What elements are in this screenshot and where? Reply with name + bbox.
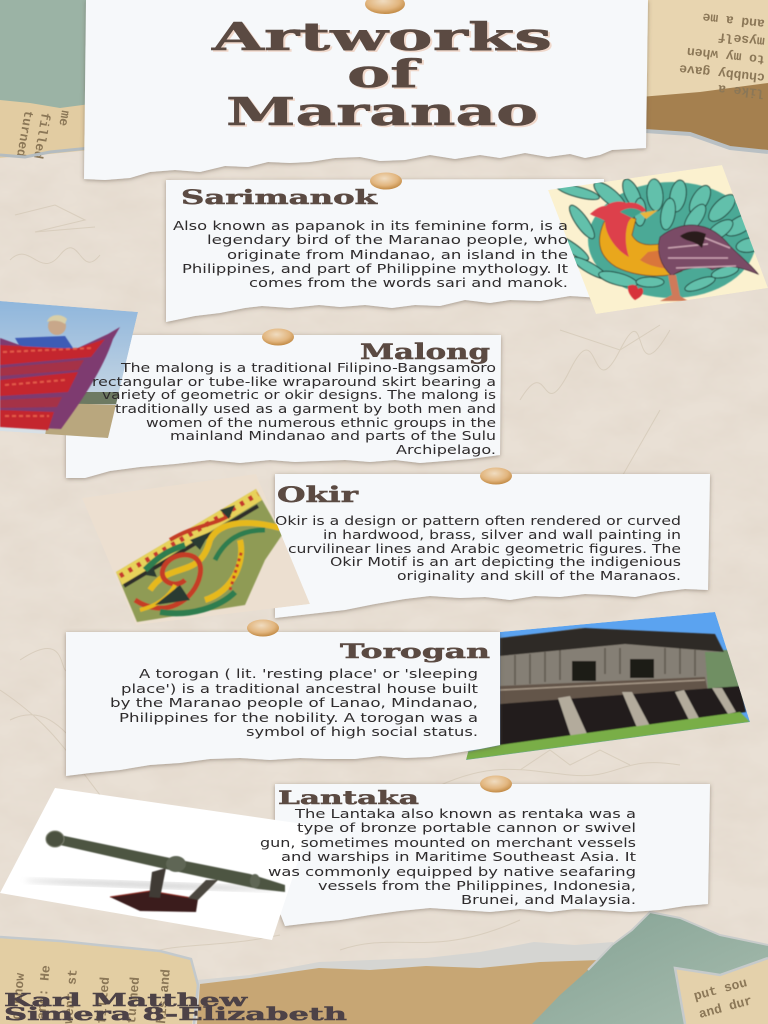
collage corner: bottom strip: [0, 912, 768, 1024]
panel: Lantaka: [275, 784, 710, 926]
collage corner: top left: turned: [13, 109, 36, 158]
heading: Sarimanok: Sarimanok: [181, 186, 378, 209]
collage corner: bottom strip: and: He: [34, 964, 54, 1020]
image: okir pattern: [116, 488, 310, 623]
heading: Malong: Malong: [360, 339, 490, 364]
collage corner: top left: [0, 0, 90, 160]
pin: title: [365, 0, 405, 14]
text: Malong body: traditionally used as a garment by both men and: [115, 401, 496, 416]
collage corner: top right: like a: [717, 81, 765, 101]
text: Okir body: curvilinear lines and Arabic geometric figures. The: [288, 541, 681, 556]
heading: Okir: Okir: [277, 482, 359, 507]
image: woman with malong: [0, 301, 140, 438]
text: Malong body: variety of geometric or okir designs. The malong is: [102, 387, 496, 402]
image: torogan house: [466, 612, 750, 760]
heading: Lantaka: Lantaka: [278, 788, 419, 809]
text: Sarimanok body: legendary bird of the Maranao people, who: [207, 232, 568, 247]
text: Malong body: rectangular or tube-like wraparound skirt bearing a: [92, 374, 496, 389]
text: Lantaka body: Brunei, and Malaysia.: [461, 892, 636, 907]
collage corner: bottom strip: and dur: [697, 993, 754, 1022]
pin: Okir: [480, 468, 512, 484]
text: Malong body: Archipelago.: [396, 442, 496, 457]
panel: Okir: [275, 474, 710, 618]
collage corner: top left: me: [55, 109, 73, 127]
title text: Maranao: [226, 89, 538, 134]
collage corner: top right: myself: [717, 29, 765, 49]
text: Sarimanok body: comes from the words sari and manok.: [249, 275, 568, 290]
text: Torogan body: A torogan ( lit. 'resting place' or 'sleeping: [139, 666, 478, 681]
heading: Torogan: Torogan: [340, 640, 490, 663]
title text: Maranao: [228, 90, 540, 136]
title text: [210, 14, 554, 136]
text: Lantaka body: type of bronze portable cannon or swivel: [297, 820, 636, 835]
text: Sarimanok body: originate from Mindanao, an island in the: [227, 247, 568, 262]
text: Torogan body: by the Maranao people of Lanao, Mindanao,: [110, 695, 478, 710]
text: Malong body: women of the numerous ethnic groups in the: [146, 415, 496, 430]
title text: of: [347, 51, 422, 96]
collage corner: top right: and a me: [702, 9, 765, 31]
text: Lantaka body: vessels from the Philippines, Indonesia,: [318, 878, 636, 893]
collage corner: bottom strip: filled: [94, 976, 113, 1024]
text: Lantaka body: [260, 806, 636, 907]
footer: author credit: [4, 990, 347, 1024]
text: Torogan body: place') is a traditional ancestral house built: [121, 681, 478, 696]
panel: Sarimanok: [166, 179, 604, 322]
text: Okir body: originality and skill of the Maranaos.: [397, 568, 681, 583]
collage corner: bottom strip: his and: [154, 969, 174, 1024]
image: sarimanok bird: [548, 165, 768, 314]
collage corner: top right: [640, 0, 768, 152]
title text: of: [349, 52, 424, 98]
panel: Malong: [66, 335, 501, 478]
text: Okir body: in hardwood, brass, silver and wall painting in: [323, 527, 681, 542]
text: Malong body: mainland Mindanao and parts of the Sulu: [170, 428, 496, 443]
text: Torogan body: [110, 666, 478, 739]
pin: Sarimanok: [370, 172, 402, 190]
text: Lantaka body: The Lantaka also known as rentaka was a: [294, 806, 636, 821]
collage corner: top left: filled: [30, 111, 53, 160]
text: Malong body: [92, 360, 496, 457]
text: Torogan body: Philippines for the nobility. A torogan was a: [119, 710, 478, 725]
collage corner: bottom strip: o know: [9, 972, 28, 1020]
text: Okir body: [275, 513, 681, 583]
title text: Artworks: [212, 16, 554, 60]
collage corner: bottom strip: put sou: [692, 975, 749, 1004]
text: Okir body: Okir Motif is an art depicting the indigenious: [330, 554, 681, 569]
text: Lantaka body: was commonly equipped by native seafaring: [268, 864, 636, 879]
text: Torogan body: symbol of high social status.: [246, 724, 478, 739]
title text: Artworks: [210, 14, 552, 59]
collage corner: bottom strip: went st: [61, 969, 81, 1024]
collage corner: top right: to my when: [686, 44, 765, 67]
text: Lantaka body: gun, sometimes mounted on merchant vessels: [260, 835, 636, 850]
pin: Lantaka: [480, 776, 512, 792]
text: Sarimanok body: Also known as papanok in its feminine form, is a: [173, 218, 568, 233]
text: Sarimanok body: [173, 218, 568, 290]
text: Malong body: The malong is a traditional Filipino-Bangsamoro: [120, 360, 496, 375]
collage corner: top right: chubby gave: [678, 61, 765, 85]
text: Lantaka body: and warships in Maritime Southeast Asia. It: [281, 849, 636, 864]
pin: Torogan: [247, 620, 279, 636]
collage corner: bottom strip: turned: [124, 976, 143, 1024]
text: Sarimanok body: Philippines, and part of Philippine mythology. It: [182, 261, 568, 276]
panel: Torogan: [66, 632, 500, 776]
footer: author credit: Karl Matthew: [4, 990, 248, 1011]
image: lantaka cannon: [0, 788, 310, 940]
pin: Malong: [262, 328, 294, 346]
text: Okir body: Okir is a design or pattern often rendered or curved: [275, 513, 681, 528]
title panel: [84, 0, 648, 180]
